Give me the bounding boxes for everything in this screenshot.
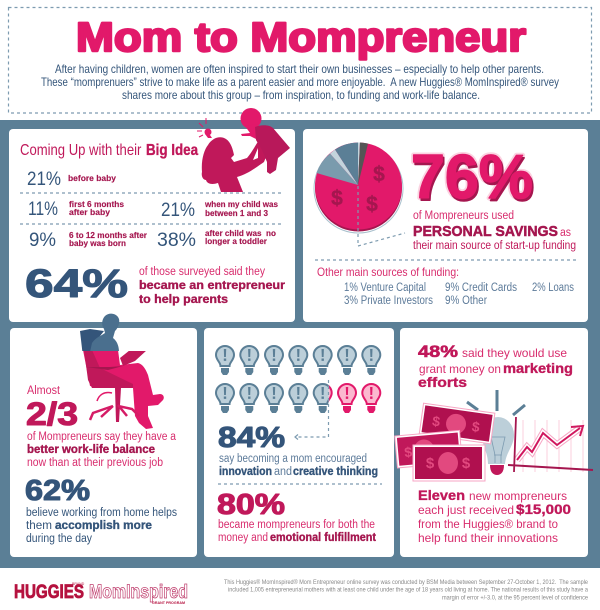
stat: 11% first 6 months: 11% bbox=[28, 199, 58, 220]
stat: 9% 6 to 12 months: baby was born bbox=[69, 238, 126, 248]
logo: Huggies MomInspired: GRANT PROGRAM bbox=[152, 601, 185, 605]
stat: 21% before baby: 21% bbox=[27, 169, 61, 190]
text: 84%: creative thinking bbox=[293, 466, 378, 478]
illustration: light bulb bbox=[467, 390, 525, 475]
text: almost 2/3: of Mompreneurs say they have a bbox=[27, 431, 177, 443]
stat: 38% no longer a toddler: longer a toddler bbox=[205, 236, 268, 246]
illustration: woman in office chair bbox=[80, 314, 164, 429]
pie chart: $ bbox=[366, 193, 378, 216]
panel background bbox=[10, 328, 197, 557]
text: 84% bbox=[218, 422, 378, 478]
intro text bbox=[41, 62, 559, 102]
pie chart: $ bbox=[373, 163, 385, 186]
text: 62%: believe working from home helps bbox=[26, 507, 177, 519]
illustration: stack of dollar bills: $ bbox=[462, 455, 471, 472]
panel background bbox=[204, 328, 394, 557]
text: 62%: during the day bbox=[26, 533, 92, 545]
text: personal savings: PERSONAL SAVINGS bbox=[413, 223, 558, 240]
text: 80% bbox=[217, 489, 376, 544]
text: almost 2/3: better work-life balance bbox=[27, 444, 155, 456]
title: Mom to Mompreneur bbox=[76, 14, 526, 60]
stat: 76%: 76% bbox=[411, 143, 533, 212]
stat: 11% first 6 months bbox=[28, 199, 124, 220]
text: other sources of funding: 1% Venture Capital bbox=[344, 282, 426, 294]
text: eleven new mompreneurs: Eleven bbox=[418, 487, 465, 503]
stat: 11% first 6 months: after baby bbox=[69, 207, 110, 217]
pictogram: row two of light bulbs bbox=[216, 384, 380, 413]
text: other sources of funding: 3% Private Investors bbox=[344, 295, 433, 307]
icon: small light bulb bbox=[197, 118, 212, 138]
logo: Huggies MomInspired: MomInspired bbox=[89, 582, 188, 603]
text: almost 2/3: Almost bbox=[27, 385, 61, 397]
text: almost 2/3: now than at their previous job bbox=[27, 457, 163, 469]
text: 84%: say becoming a mom encouraged bbox=[219, 453, 367, 465]
text: 62%: 62% bbox=[25, 475, 90, 507]
stat: 9% 6 to 12 months: 9% bbox=[29, 230, 56, 251]
text: 84%: innovation bbox=[219, 466, 272, 478]
panel background bbox=[303, 129, 588, 322]
illustration: stack of dollar bills: $ bbox=[426, 455, 435, 472]
panel: personal savings bbox=[303, 129, 588, 322]
text: personal savings bbox=[413, 210, 576, 252]
panel: big idea bbox=[9, 108, 295, 322]
illustration: stack of dollar bills: $ bbox=[431, 413, 441, 430]
pie chart: $ bbox=[331, 187, 343, 210]
panel: work-life balance bbox=[10, 314, 197, 557]
text: 80%: money and bbox=[218, 532, 268, 544]
text: eleven new mompreneurs bbox=[418, 487, 571, 545]
text: other sources of funding: Other main sources of funding: bbox=[317, 265, 459, 279]
pie chart bbox=[314, 142, 405, 246]
stat: 38% no longer a toddler: after child was no bbox=[205, 228, 276, 238]
text: other sources of funding bbox=[317, 265, 574, 307]
panel background bbox=[400, 328, 588, 557]
blue background band bbox=[0, 120, 600, 568]
text: 80%: became mompreneurs for both the bbox=[218, 519, 375, 531]
text: 62%: them bbox=[26, 520, 52, 532]
stat: 21% child between 1 and 3: 21% bbox=[161, 200, 195, 221]
stat: 21% before baby bbox=[27, 169, 116, 190]
text: almost 2/3: 2/3 bbox=[26, 396, 78, 432]
pictogram: row one of light bulbs bbox=[216, 346, 380, 375]
stat: 9% 6 to 12 months: 6 to 12 months after bbox=[69, 230, 148, 240]
stat: 38% no longer a toddler: 38% bbox=[157, 230, 196, 251]
stat: 11% first 6 months: first 6 months bbox=[69, 199, 124, 209]
panel: grant money bbox=[395, 328, 593, 557]
text: became an entrepreneur: to help parents bbox=[139, 292, 228, 306]
heading: coming up with their big idea: Coming Up with their bbox=[20, 142, 145, 159]
text: 48% marketing efforts: said they would use bbox=[462, 346, 567, 360]
stat: 21% child between 1 and 3: when my child was bbox=[204, 199, 278, 209]
text: became an entrepreneur: became an entrepreneur bbox=[139, 278, 285, 292]
text: 62% bbox=[25, 475, 177, 545]
header dashed frame bbox=[8, 8, 592, 113]
text: other sources of funding: 9% Credit Cards bbox=[445, 282, 517, 294]
text: eleven new mompreneurs: new mompreneurs bbox=[469, 489, 567, 503]
stat: 21% before baby: before baby bbox=[68, 173, 116, 183]
text: 48% marketing efforts: 48% bbox=[418, 342, 458, 361]
footnote: margin of error +/-3.0, at the 95 percent level of confidence bbox=[442, 594, 589, 602]
text: almost 2/3 bbox=[26, 385, 177, 469]
panel background bbox=[9, 129, 295, 322]
text: 48% marketing efforts: efforts bbox=[418, 374, 467, 390]
text: 48% marketing efforts bbox=[418, 342, 573, 390]
arrow: dotted leader to 84% bbox=[295, 380, 328, 440]
panel: innovation bbox=[204, 328, 394, 557]
text: 84%: 84% bbox=[218, 422, 285, 454]
footnote bbox=[224, 579, 589, 602]
stat: 9% 6 to 12 months bbox=[29, 230, 148, 251]
text: 48% marketing efforts: grant money on bbox=[419, 362, 501, 376]
text: eleven new mompreneurs: help fund their innovations bbox=[418, 531, 558, 545]
stat: 64%: 64% bbox=[25, 262, 128, 306]
illustration: stack of dollar bills: $ bbox=[471, 418, 481, 435]
text: eleven new mompreneurs: from the Huggies® brand to bbox=[418, 517, 558, 531]
intro text: shares more about this group – from inspiration, to funding and work-life balance. bbox=[122, 88, 480, 102]
illustration: stack of dollar bills: $ bbox=[404, 444, 413, 460]
stat: 38% no longer a toddler bbox=[157, 228, 276, 251]
logo: Huggies MomInspired: BRAND bbox=[72, 582, 85, 586]
illustration: rising chart bbox=[508, 417, 593, 472]
text: other sources of funding: 2% Loans bbox=[532, 282, 574, 294]
text: eleven new mompreneurs: each just received bbox=[418, 503, 514, 517]
logo: Huggies MomInspired: HUGGIES bbox=[14, 582, 84, 603]
stat: 21% child between 1 and 3 bbox=[161, 199, 278, 221]
text: eleven new mompreneurs: $15,000 bbox=[516, 501, 571, 517]
text: personal savings: as bbox=[560, 227, 571, 239]
text: 62%: accomplish more bbox=[55, 520, 152, 532]
text: became an entrepreneur: of those surveyed said they bbox=[139, 266, 265, 278]
text: 80%: 80% bbox=[217, 489, 285, 521]
text: 84%: and bbox=[274, 466, 292, 478]
stat: 76%: 76% bbox=[412, 146, 534, 214]
heading: coming up with their big idea: Big Idea bbox=[146, 142, 198, 159]
text: personal savings: their main source of start-up funding bbox=[413, 240, 576, 252]
illustration: stack of dollar bills bbox=[395, 403, 495, 481]
illustration: mom lifting baby bbox=[202, 108, 290, 192]
text: 80%: emotional fulfillment bbox=[270, 532, 376, 544]
text: became an entrepreneur bbox=[139, 266, 285, 306]
text: 48% marketing efforts: marketing bbox=[503, 360, 573, 376]
stat: 21% child between 1 and 3: between 1 and 3 bbox=[205, 208, 268, 218]
logo: Huggies MomInspired bbox=[14, 582, 188, 605]
text: personal savings: of Mompreneurs used bbox=[413, 210, 514, 222]
text: other sources of funding: 9% Other bbox=[445, 295, 487, 307]
stat: 76%: 76% bbox=[411, 143, 533, 212]
